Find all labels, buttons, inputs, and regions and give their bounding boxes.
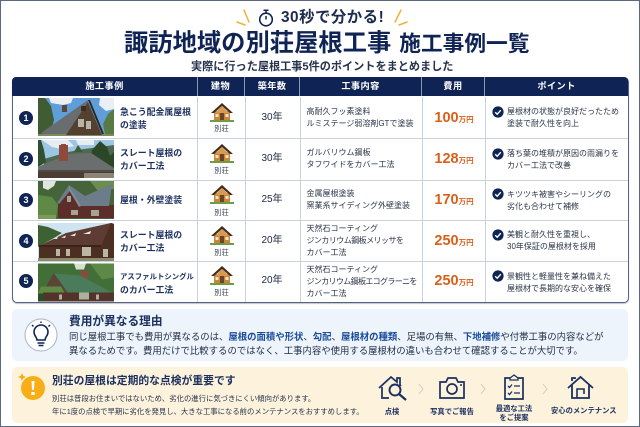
- point: 屋根材の状態が良好だったため: [507, 107, 619, 116]
- building label: 別荘: [214, 248, 229, 257]
- arrow: [480, 383, 486, 395]
- row 3 title: 屋根・外壁塗装: [120, 195, 182, 205]
- icon: clipboard: [503, 373, 525, 401]
- number 2: 2: [23, 154, 28, 164]
- header: cost: 費用: [443, 81, 463, 91]
- work content: [306, 265, 417, 298]
- cost: 128万円: [434, 151, 474, 167]
- row 2 title: スレート屋根の: [120, 148, 182, 158]
- subtitle: 実際に行った屋根工事5件のポイントをまとめました: [191, 61, 453, 73]
- step label: inspection: 点検: [385, 406, 399, 416]
- panel body: [52, 392, 364, 418]
- header: cost: [422, 77, 485, 96]
- panel body: 異なるためです。費用だけで比較するのではなく、工事内容や使用する屋根材の違いも合わせて確認することが大切です。: [69, 345, 583, 356]
- icon: check: [492, 106, 504, 118]
- point: キツツキ被害やシーリングの: [507, 190, 611, 199]
- work content: ジンカリウム鋼板メリッサを: [306, 236, 403, 245]
- panel body: [69, 330, 604, 358]
- header: point: ポイント: [537, 81, 576, 91]
- row 2: [12, 139, 628, 180]
- icon: house: [210, 226, 234, 245]
- point: 景観性と軽量性を兼ね備えた: [507, 272, 611, 281]
- arrow: [542, 383, 548, 395]
- number 1: [19, 111, 33, 125]
- step label: photo report: 写真でご報告: [430, 406, 474, 416]
- header: case: 施工事例: [85, 81, 124, 91]
- step label: maintenance: 安心のメンテナンス: [551, 406, 617, 415]
- header: work: [300, 77, 422, 96]
- icon: check: [492, 148, 504, 160]
- cost: 170万円: [434, 192, 474, 208]
- work content: 高耐久フッ素塗料: [306, 107, 370, 116]
- point: 劣化も合わせて補修: [507, 202, 579, 211]
- point: [507, 107, 619, 128]
- row 5 title: アスファルトシングル: [120, 272, 194, 281]
- header: age: [245, 77, 300, 96]
- row 1: [12, 97, 628, 139]
- number 2: [19, 152, 33, 166]
- building label: 別荘: [214, 166, 229, 175]
- header: building: [197, 77, 245, 96]
- building label: 別荘: [214, 288, 229, 296]
- photo: roof and wall painting: [38, 181, 114, 219]
- number 5: 5: [23, 276, 28, 286]
- panel body: 年に1度の点検で早期に劣化を発見し、大きな工事になる前のメンテナンスをおすすめします。: [52, 406, 364, 416]
- step label: proposal: をご提案: [499, 413, 529, 422]
- icon: light bulb: [24, 318, 58, 352]
- age: 20年: [261, 235, 283, 246]
- building label: 別荘: [214, 208, 229, 216]
- header: building: 建物: [211, 81, 230, 91]
- work content: 天然石コーティング: [306, 224, 378, 233]
- row 2 title: [120, 148, 182, 171]
- number 4: [19, 234, 33, 248]
- age: 30年: [261, 153, 283, 164]
- header: age: 築年数: [258, 81, 286, 91]
- age: 20年: [261, 275, 283, 286]
- row 2 title: カバー工法: [120, 161, 164, 171]
- row 4 title: [120, 230, 182, 253]
- work content: [306, 224, 403, 257]
- icon: left sparkle rays: [236, 9, 250, 26]
- step label: proposal: [488, 404, 540, 422]
- photo: brown slate roof: [38, 223, 114, 261]
- icon: check: [492, 229, 504, 241]
- panel body: 同じ屋根工事でも費用が異なるのは、屋根の面積や形状、勾配、屋根材の種類、足場の有無、下地補修や付帯工事の内容などが: [69, 331, 604, 342]
- table header: [12, 77, 628, 96]
- case table: [12, 77, 629, 303]
- icon: check: [492, 188, 504, 200]
- building label: 別荘: [214, 124, 229, 133]
- cost: 250万円: [434, 273, 474, 289]
- panel: why costs differ: [12, 309, 628, 361]
- point: 落ち葉の堆積が原因の雨漏りを: [507, 149, 619, 158]
- arrow: [418, 383, 424, 395]
- work content: カバー工法: [306, 289, 346, 298]
- row 4: [12, 221, 628, 262]
- icon: warning circle: [18, 373, 48, 401]
- point: 塗装で耐久性を向上: [507, 119, 579, 128]
- panel body: 別荘は普段お住まいではないため、劣化の進行に気づきにくい傾向があります。: [52, 394, 315, 402]
- row 5 title: のカバー工法: [120, 285, 173, 295]
- photo: A-frame metal roof: [38, 98, 114, 136]
- age: 30年: [261, 112, 283, 123]
- work content: ルミステージ弱溶剤GTで塗装: [306, 119, 413, 128]
- eyebrow: 30 seconds: [236, 8, 408, 27]
- point: 30年保証の屋根材を採用: [507, 242, 596, 251]
- row 3: [12, 180, 628, 221]
- icon: right sparkle rays: [394, 9, 408, 26]
- work content: カバー工法: [306, 248, 346, 257]
- icon: house: [210, 103, 234, 122]
- title: 諏訪地域の別荘屋根工事 施工事例一覧: [124, 30, 529, 57]
- cost: 250万円: [434, 233, 474, 249]
- icon: house: [210, 185, 234, 204]
- age: 25年: [261, 194, 283, 205]
- point: [507, 272, 611, 293]
- icon: stopwatch: [258, 10, 274, 27]
- work content: ジンカリウム鋼板エコグラーニを: [306, 277, 417, 286]
- number 5: [19, 274, 33, 288]
- number 3: [19, 193, 33, 207]
- header: case: [12, 77, 198, 96]
- icon: check: [492, 270, 504, 282]
- eyebrow text: 30秒で分かる!: [281, 9, 384, 26]
- work content: [306, 189, 410, 210]
- row 1 title: [120, 107, 191, 130]
- point: [507, 149, 619, 170]
- number 3: 3: [23, 195, 28, 205]
- row 4 title: カバー工法: [120, 243, 164, 253]
- number 1: 1: [23, 113, 28, 123]
- icon: house: [567, 375, 594, 400]
- panel heading: 費用が異なる理由: [69, 315, 163, 328]
- work content: ガルバリウム鋼板: [306, 148, 370, 157]
- number 4: 4: [23, 236, 28, 246]
- row 1 title: 急こう配金属屋根: [120, 107, 191, 117]
- row 5 title: [120, 272, 194, 295]
- row 4 title: スレート屋根の: [120, 230, 182, 240]
- work content: 窯業系サイディング外壁塗装: [306, 201, 410, 210]
- icon: house: [210, 144, 234, 163]
- work content: 天然石コーティング: [306, 265, 378, 274]
- icon: house with magnifier: [378, 375, 408, 401]
- work content: [306, 148, 394, 169]
- panel: regular inspection: [12, 367, 628, 423]
- header: work: 工事内容: [341, 81, 380, 91]
- point: [507, 190, 611, 211]
- photo: slate roof with chimney: [38, 140, 114, 178]
- icon: house: [210, 266, 234, 285]
- cost: 100万円: [434, 110, 474, 126]
- point: 屋根材で長期的な安心を確保: [507, 284, 611, 293]
- work content: 金属屋根塗装: [306, 189, 354, 198]
- point: [507, 230, 596, 251]
- point: カバー工法で改善: [507, 161, 571, 170]
- work content: タフワイドをカバー工法: [306, 160, 394, 169]
- row 1 title: の塗装: [120, 120, 147, 130]
- panel heading: 別荘の屋根は定期的な点検が重要です: [52, 375, 236, 387]
- icon: camera: [438, 376, 466, 399]
- step label: proposal: 最適な工法: [496, 404, 532, 413]
- work content: [306, 107, 414, 128]
- photo: green asphalt shingle roof: [38, 264, 114, 302]
- point: 美観と耐久性を重視し、: [507, 230, 595, 239]
- row 5: [19, 262, 611, 302]
